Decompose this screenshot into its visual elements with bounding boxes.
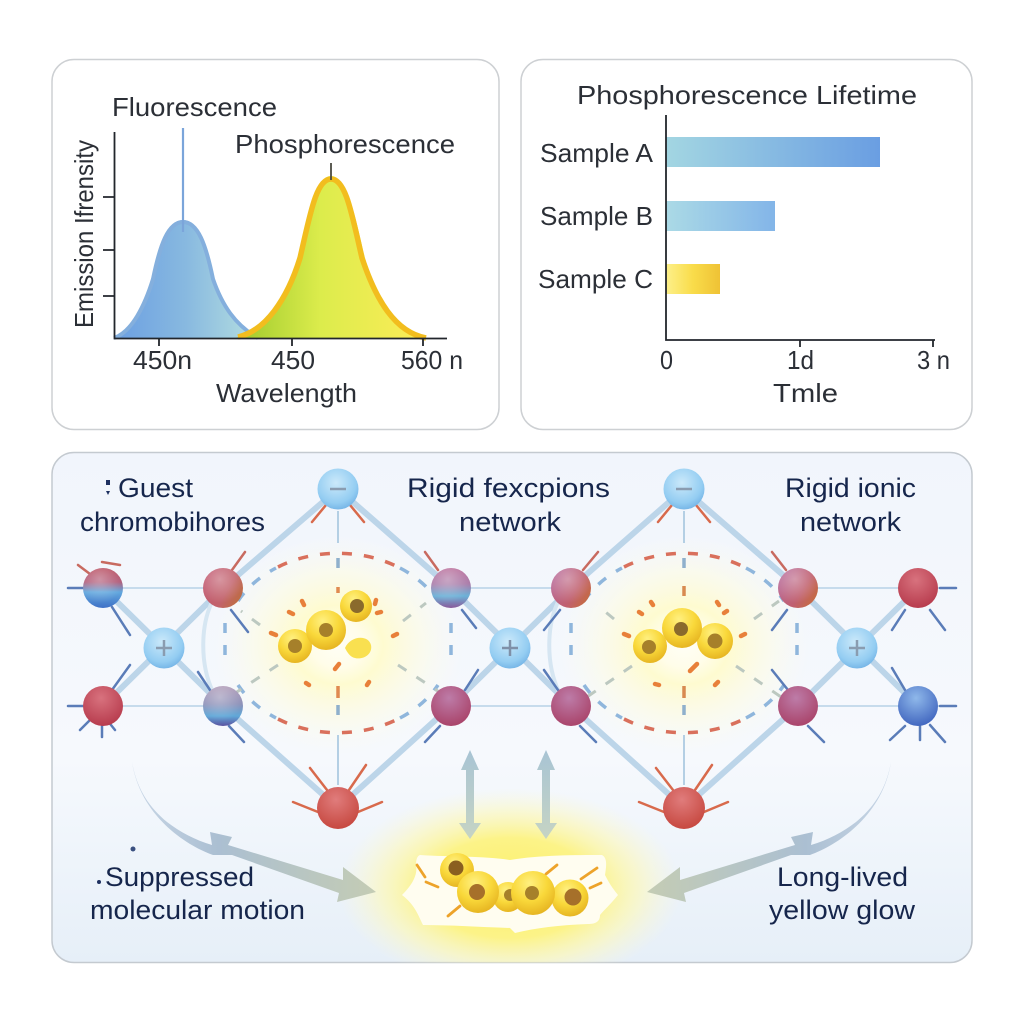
x tick label: 3 n — [917, 345, 950, 375]
x tick label: 560 n — [401, 345, 463, 375]
label: suppressed molecular motion: Suppressed — [105, 862, 254, 892]
glow: left guest site — [213, 535, 463, 755]
label: guest chromophores — [80, 473, 265, 537]
label: rigid ionic network — [785, 473, 916, 537]
line: fluorescence marker — [182, 128, 184, 232]
arrow: vertical double left — [459, 750, 481, 839]
node: purple ion — [551, 686, 591, 726]
y axis title: Emission Ifrensity — [69, 140, 99, 328]
label: guest chromophores: chromobihores — [80, 507, 265, 537]
curve: phosphorescence peak — [235, 176, 426, 338]
dashed cage: left — [223, 511, 451, 785]
arrow: right curved — [647, 762, 891, 902]
label: Sample C: Sample C — [538, 264, 653, 294]
label: Sample A: Sample A — [540, 138, 654, 168]
label: long-lived yellow glow: yellow glow — [769, 895, 916, 925]
line: phosphorescence marker — [330, 163, 332, 180]
node: top anion left — [318, 468, 358, 510]
node: blue ion — [898, 686, 938, 726]
label: long-lived yellow glow — [769, 862, 916, 925]
label: suppressed molecular motion — [90, 846, 305, 925]
label: Fluorescence: Fluorescence — [112, 92, 277, 122]
node: bottom red ion left — [317, 787, 359, 829]
bar: Sample A — [666, 137, 880, 167]
label: rigid network centre — [407, 473, 610, 537]
node: red-blue ion — [83, 568, 123, 608]
bar: Sample C — [666, 264, 720, 294]
chart axes — [103, 132, 447, 346]
label: Phosphorescence: Phosphorescence — [235, 129, 455, 159]
node: purple ion — [431, 568, 471, 608]
node: grey-blue ion — [203, 686, 243, 726]
arrow: vertical double right — [535, 750, 557, 839]
x tick label: 0 — [660, 345, 673, 375]
x axis title: Tmle — [773, 378, 838, 408]
label: long-lived yellow glow: Long-lived — [777, 862, 908, 892]
label: guest chromophores: Guest — [118, 473, 194, 503]
label: suppressed molecular motion: molecular motion — [90, 895, 305, 925]
glow: right guest site — [559, 535, 809, 755]
panel: rigid ionic network — [52, 452, 972, 988]
label: rigid ionic network: network — [800, 507, 902, 537]
emitter: bottom glowing molecule — [402, 853, 618, 933]
x tick label: 450n — [133, 345, 192, 375]
chart title: Phosphorescence Lifetime — [577, 80, 917, 110]
label: Sample B: Sample B — [540, 201, 653, 231]
node: purple ion — [778, 686, 818, 726]
node: red-orange ion — [203, 568, 243, 608]
node: purple ion — [778, 568, 818, 608]
node: cation right — [836, 628, 878, 668]
lattice bonds — [67, 489, 956, 808]
dashed cage: right — [571, 511, 797, 785]
label: rigid network centre: Rigid fexcpions — [407, 473, 610, 503]
label: rigid network centre: network — [459, 507, 562, 537]
bar: Sample B — [666, 201, 775, 231]
arrow: left curved — [132, 762, 376, 902]
node: cation middle — [490, 628, 530, 668]
chart axes — [666, 115, 935, 347]
label: rigid ionic network: Rigid ionic — [785, 473, 916, 503]
guest molecule: right — [624, 602, 745, 685]
node spikes — [68, 505, 956, 812]
node: cation left — [144, 628, 184, 668]
node: top anion right — [664, 468, 704, 510]
guest molecule: left — [271, 590, 397, 685]
node: red ion — [898, 568, 938, 608]
curve: fluorescence peak — [114, 220, 258, 338]
node: bottom red ion right — [663, 787, 705, 829]
x tick label: 1d — [787, 345, 814, 375]
node: crimson ion — [431, 686, 471, 726]
node: magenta ion — [551, 568, 591, 608]
x tick label: 450 — [271, 345, 315, 375]
node: red ion — [83, 686, 123, 726]
glow: bottom emitter — [352, 794, 668, 962]
x axis title: Wavelength — [216, 378, 357, 408]
panel: phosphorescence lifetime — [521, 60, 972, 430]
panel: emission spectrum — [52, 60, 499, 430]
